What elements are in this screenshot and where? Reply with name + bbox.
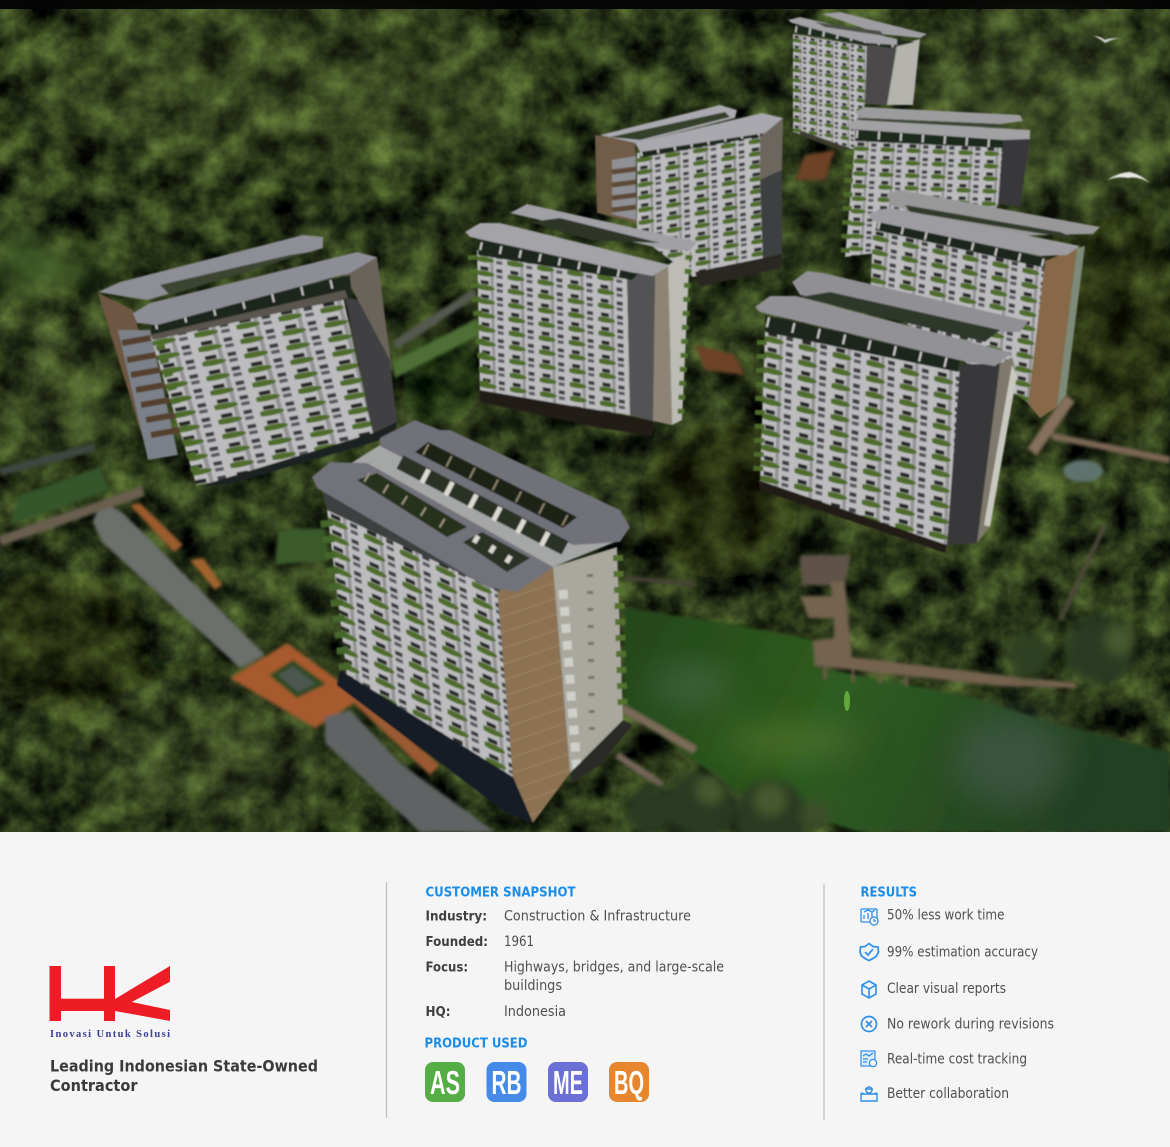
row: industry: Industry: bbox=[426, 908, 487, 924]
company descriptor: Leading Indonesian State-Owned bbox=[50, 1056, 318, 1076]
colonnade bbox=[400, 462, 565, 548]
panel: customer snapshot bbox=[426, 884, 724, 1020]
logo tagline: Inovasi Untuk Solusi bbox=[50, 1029, 170, 1040]
lawn by tower bbox=[275, 528, 328, 565]
result: cost tracking: Real-time cost tracking bbox=[887, 1052, 1027, 1068]
icon: report with clock bbox=[861, 1051, 877, 1067]
lake bbox=[623, 608, 1170, 832]
back roof ring bbox=[380, 420, 630, 545]
tower: center front bbox=[465, 204, 697, 436]
row: hq bbox=[426, 1004, 566, 1020]
forest light and shadow bbox=[0, 20, 1170, 820]
result: less work time: 50% less work time bbox=[887, 908, 1004, 924]
icon: worker with plan bbox=[861, 1087, 877, 1101]
aerial photo: residential towers in forest bbox=[0, 0, 1170, 851]
divider left bbox=[386, 882, 388, 1118]
icon: cube bbox=[862, 981, 876, 998]
row: focus: Focus: bbox=[426, 960, 468, 976]
heading: customer snapshot: CUSTOMER SNAPSHOT bbox=[426, 884, 576, 900]
divider right bbox=[823, 884, 825, 1120]
orange ground center bbox=[695, 345, 745, 375]
result: visual reports bbox=[862, 981, 1006, 998]
white birds bbox=[1094, 36, 1150, 183]
tower: bottom front bbox=[312, 420, 633, 823]
icon: BQ: BQ bbox=[614, 1064, 644, 1101]
icon: AS bbox=[425, 1062, 465, 1102]
row: founded: 1961 bbox=[504, 934, 534, 950]
icon: BQ bbox=[609, 1062, 649, 1102]
heading: results: RESULTS bbox=[860, 884, 917, 900]
tower: left bbox=[98, 235, 397, 487]
icon: AS: AS bbox=[430, 1064, 460, 1101]
panel: bottom info panel bbox=[0, 832, 1170, 1147]
result: estimation accuracy: 99% estimation accuracy bbox=[887, 944, 1038, 960]
row: founded bbox=[426, 934, 534, 950]
tower: center back bbox=[595, 105, 783, 287]
icon: x in circle bbox=[862, 1016, 876, 1032]
row: hq: HQ: bbox=[426, 1004, 450, 1020]
heading: product used: PRODUCT USED bbox=[424, 1036, 528, 1052]
lake reflections bbox=[650, 663, 1065, 805]
curved grey promenade bbox=[93, 507, 265, 668]
lawn top left bbox=[0, 225, 120, 295]
tower: right front bbox=[755, 271, 1028, 553]
panel: results bbox=[860, 884, 1054, 1102]
result: no rework: No rework during revisions bbox=[887, 1016, 1054, 1032]
company logo bbox=[50, 966, 170, 1040]
lawn left bbox=[10, 467, 110, 525]
top black band bbox=[0, 0, 1170, 9]
row: industry bbox=[426, 908, 691, 924]
row: focus bbox=[426, 960, 724, 994]
orange strips bbox=[130, 503, 183, 552]
forest canopy bbox=[0, 9, 1170, 832]
rooftop terrace bbox=[340, 445, 620, 567]
icon: verified badge bbox=[860, 944, 878, 960]
bridges by tower bbox=[622, 708, 695, 750]
row: hq: Indonesia bbox=[504, 1004, 566, 1020]
back roof opening bbox=[415, 442, 577, 528]
HK logo mark bbox=[50, 966, 170, 1021]
lawn middle bbox=[392, 318, 480, 378]
icon: ME: ME bbox=[553, 1064, 583, 1101]
company descriptor: Contractor bbox=[50, 1076, 138, 1095]
company descriptor bbox=[50, 1056, 318, 1095]
icon: RB: RB bbox=[492, 1064, 522, 1101]
paths right bbox=[1032, 398, 1070, 452]
road left bbox=[0, 447, 95, 472]
boardwalk piers bbox=[825, 667, 906, 686]
row: industry: Construction & Infrastructure bbox=[504, 908, 691, 924]
orange plaza bbox=[230, 643, 362, 728]
row: founded: Founded: bbox=[426, 934, 488, 950]
result: visual reports: Clear visual reports bbox=[887, 981, 1006, 997]
row: focus: buildings bbox=[504, 978, 562, 994]
tower: right middle bbox=[868, 190, 1100, 418]
grounds: lawns, paths, plaza, lake bbox=[0, 150, 1170, 832]
row: focus: Highways, bridges, and large-scale bbox=[504, 960, 724, 976]
boardwalk bbox=[800, 582, 1076, 688]
orange strip by tower bbox=[350, 695, 440, 775]
result: collaboration: Better collaboration bbox=[887, 1086, 1009, 1102]
result: less work time bbox=[861, 908, 1004, 925]
tower: right second bbox=[845, 107, 1030, 257]
icon: RB bbox=[486, 1062, 526, 1102]
trees on the lake shore bbox=[626, 616, 1135, 851]
elevated walkway bbox=[0, 491, 143, 541]
plaza planter bbox=[269, 660, 326, 698]
icon: ME bbox=[548, 1062, 588, 1102]
front roof ring bbox=[312, 462, 553, 592]
tower: top back bbox=[788, 12, 927, 152]
road behind tower bbox=[395, 293, 475, 345]
lower grey road bbox=[325, 710, 495, 832]
icon: chart with clock bbox=[861, 909, 878, 925]
pond bbox=[1063, 460, 1103, 482]
panel: product used bbox=[424, 1036, 649, 1102]
pavilion roof bbox=[800, 555, 850, 585]
front roof opening bbox=[357, 473, 467, 537]
kayak bbox=[844, 691, 850, 711]
